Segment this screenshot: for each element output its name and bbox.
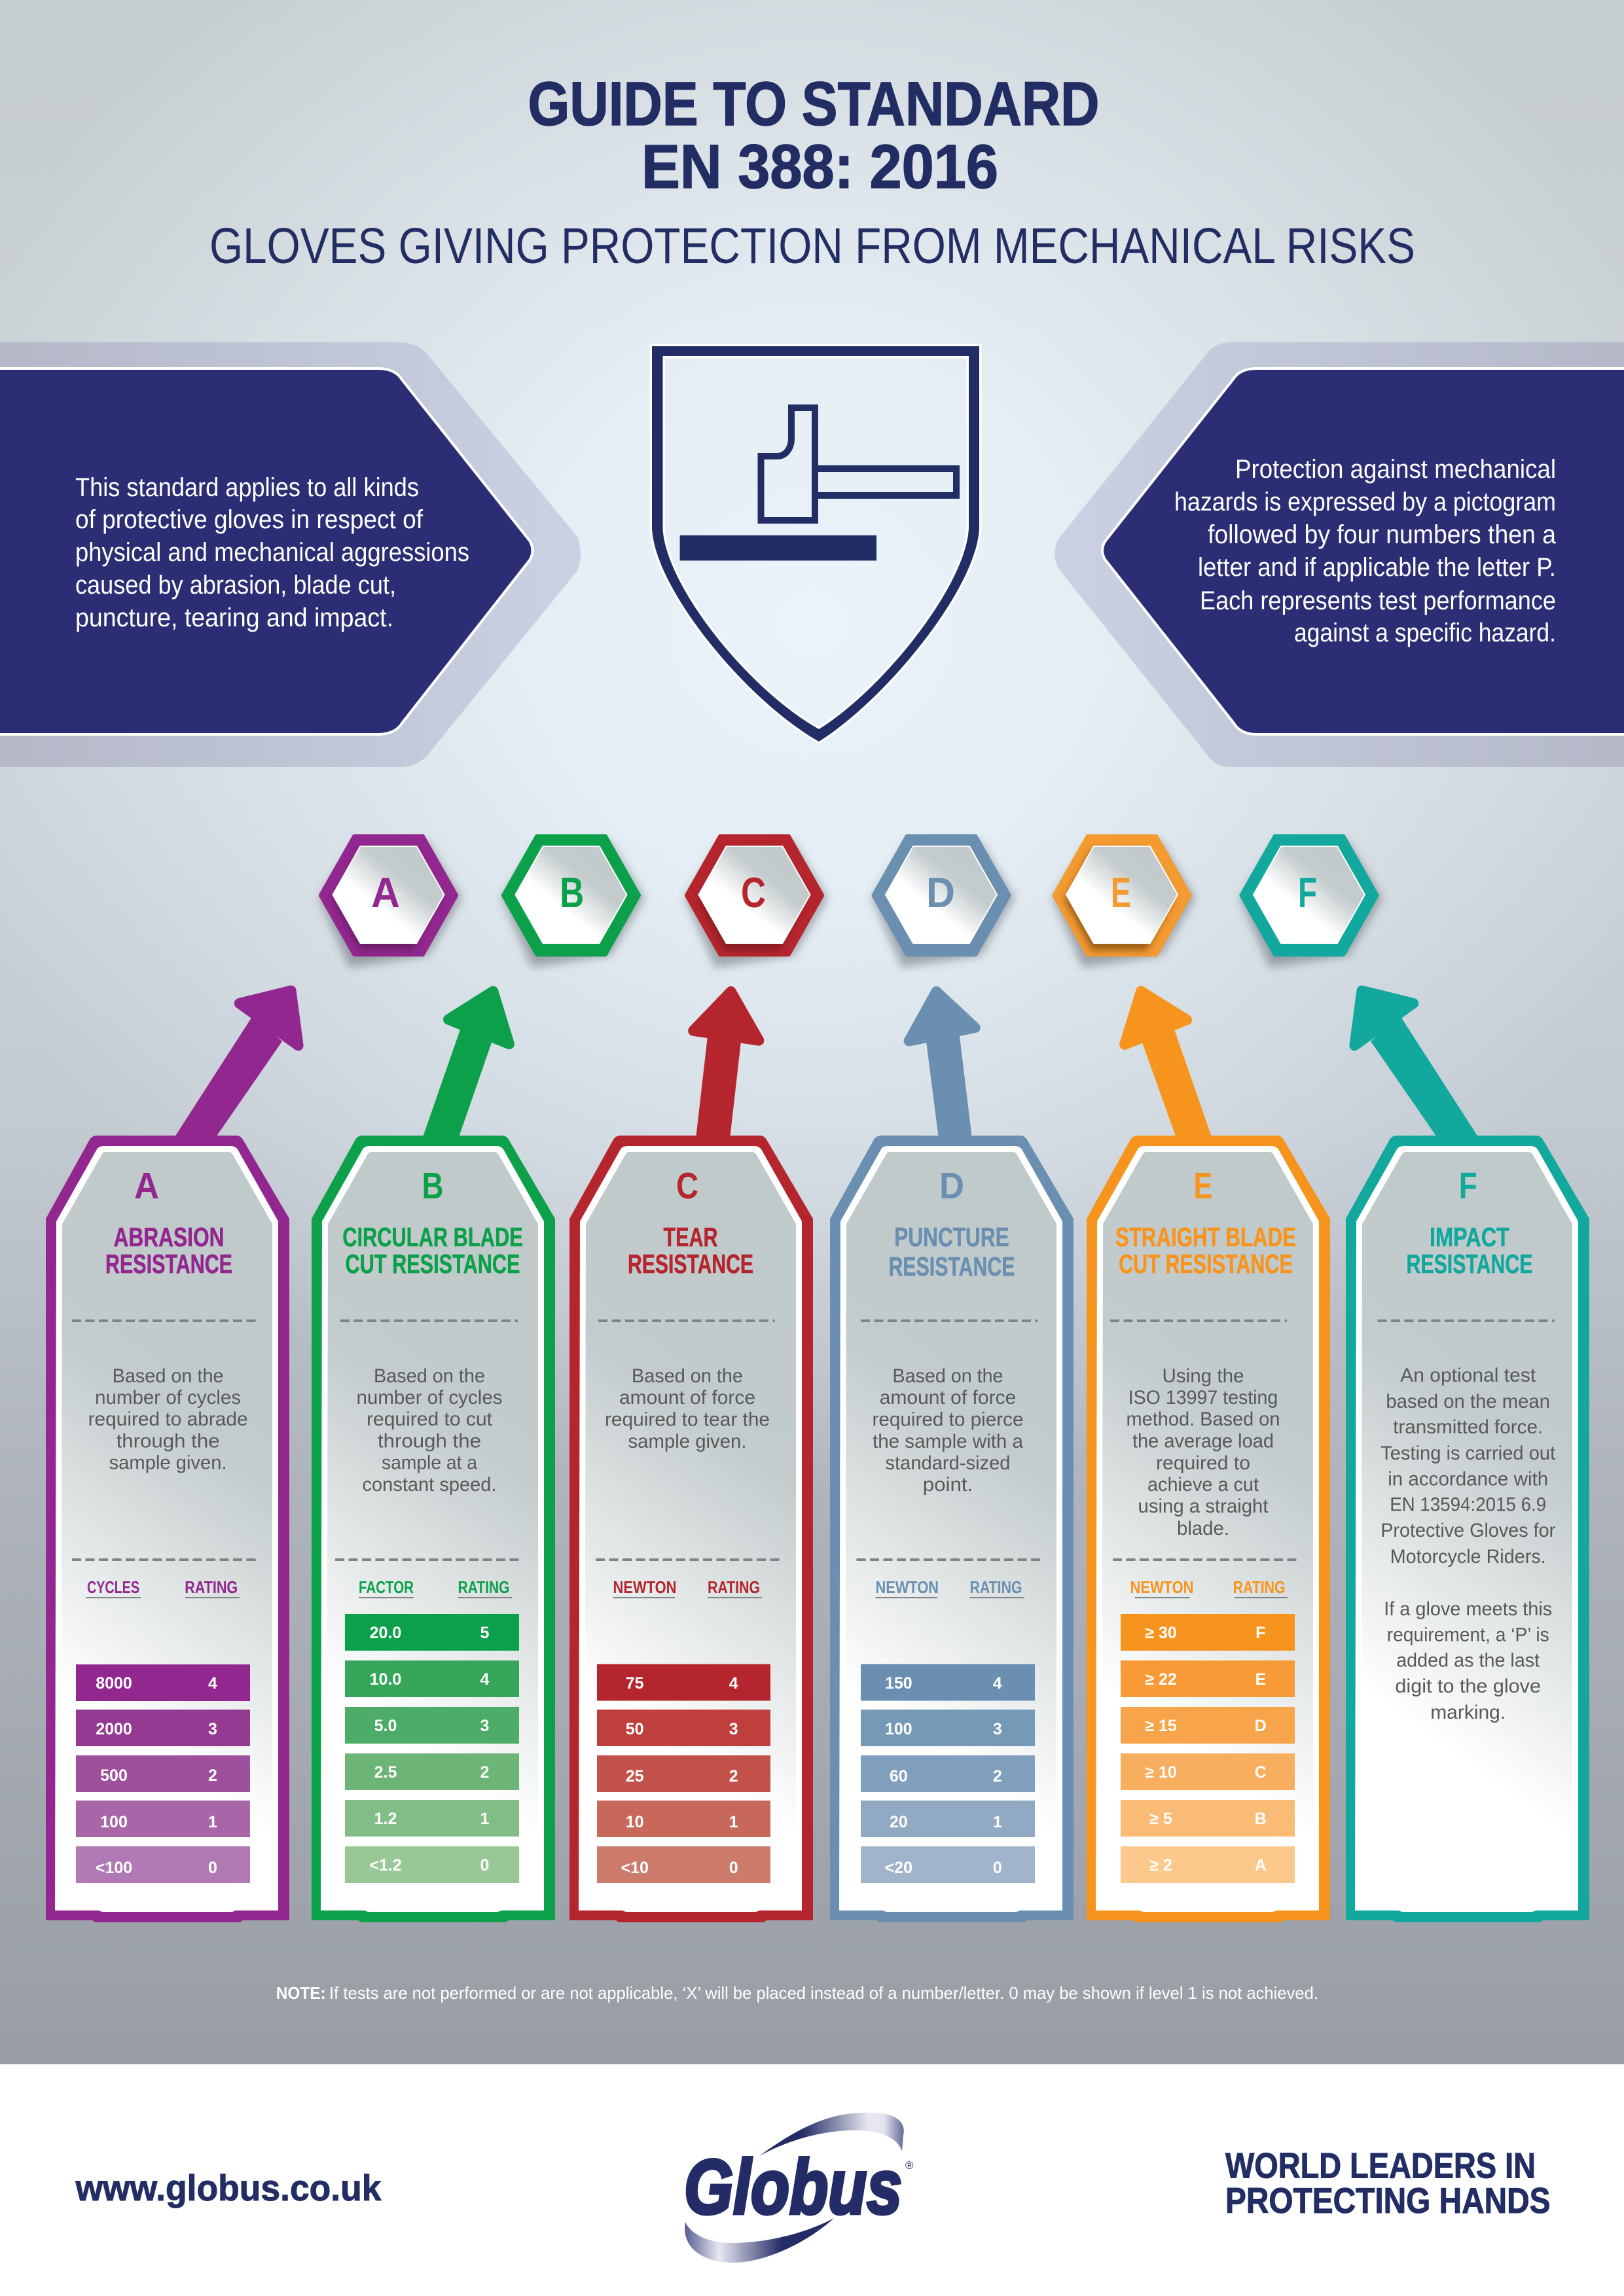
rating table: 8000 bbox=[96, 1674, 132, 1693]
rating table: 1 bbox=[729, 1813, 738, 1831]
rating table: ≥ 2 bbox=[1149, 1856, 1172, 1874]
table header: RATING bbox=[708, 1577, 760, 1597]
description: sample at a bbox=[382, 1452, 477, 1474]
rating table: <100 bbox=[96, 1859, 132, 1877]
panel: pictogram explanation: against a specific hazard. bbox=[1294, 619, 1556, 647]
description: required to tear the bbox=[605, 1408, 770, 1431]
arrow E bbox=[1125, 991, 1212, 1139]
description: required to cut bbox=[367, 1408, 493, 1430]
table header bbox=[86, 1577, 240, 1598]
card heading: CIRCULAR BLADE bbox=[342, 1222, 523, 1252]
card heading: ABRASION bbox=[114, 1222, 224, 1252]
card heading bbox=[1115, 1222, 1296, 1279]
panel: card F impact resistance bbox=[1346, 1136, 1589, 1922]
description: point. bbox=[923, 1474, 973, 1496]
rating table: 5 bbox=[480, 1624, 490, 1642]
rating table: <1.2 bbox=[369, 1856, 402, 1874]
rating table: C bbox=[1255, 1763, 1267, 1782]
description: An optional test bbox=[1400, 1365, 1536, 1386]
rating table: 500 bbox=[100, 1767, 128, 1785]
rating table: B bbox=[1255, 1810, 1267, 1828]
rating table bbox=[76, 1664, 250, 1883]
letter: D bbox=[926, 869, 955, 916]
panel: card A abrasion resistance bbox=[46, 1136, 289, 1922]
card letter: A bbox=[134, 1165, 159, 1207]
rating table bbox=[597, 1664, 770, 1883]
rating table: 50 bbox=[626, 1720, 644, 1738]
card heading: PUNCTURE bbox=[894, 1222, 1009, 1252]
table header bbox=[876, 1577, 1024, 1598]
panel: card B circular blade cut resistance bbox=[312, 1136, 555, 1922]
description: achieve a cut bbox=[1147, 1474, 1259, 1496]
description: constant speed. bbox=[363, 1474, 496, 1496]
card heading bbox=[1406, 1222, 1533, 1279]
rating table: 10.0 bbox=[370, 1670, 401, 1689]
description: ISO 13997 testing bbox=[1128, 1387, 1278, 1408]
rating table: 2 bbox=[480, 1763, 489, 1782]
description: Based on the bbox=[374, 1365, 485, 1387]
description: Based on the bbox=[893, 1365, 1003, 1387]
website: www.globus.co.uk bbox=[75, 2167, 382, 2208]
hexagon E bbox=[1053, 836, 1195, 967]
description: required to pierce bbox=[872, 1408, 1024, 1431]
rating table: 3 bbox=[993, 1720, 1002, 1738]
hexagon C bbox=[685, 836, 827, 967]
panel: card C tear resistance bbox=[569, 1136, 813, 1922]
description: using a straight bbox=[1138, 1496, 1269, 1517]
description bbox=[88, 1365, 248, 1474]
rating table: F bbox=[1255, 1624, 1265, 1642]
table header: CYCLES bbox=[87, 1577, 139, 1597]
rating table: ≥ 15 bbox=[1145, 1717, 1177, 1735]
arrow C bbox=[693, 992, 759, 1139]
rating table: 1 bbox=[480, 1810, 490, 1828]
hexagon D bbox=[872, 836, 1015, 967]
title: GUIDE TO STANDARD bbox=[528, 69, 1100, 139]
description: Based on the bbox=[113, 1365, 224, 1387]
description: added as the last bbox=[1396, 1649, 1540, 1672]
description: based on the mean bbox=[1386, 1391, 1550, 1412]
description: in accordance with bbox=[1388, 1469, 1548, 1490]
table header: NEWTON bbox=[1130, 1577, 1194, 1597]
rating table: 0 bbox=[480, 1856, 489, 1874]
rating table: 100 bbox=[885, 1720, 912, 1738]
panel: card E straight blade cut resistance bbox=[1087, 1136, 1330, 1922]
rating table: 1 bbox=[993, 1813, 1002, 1831]
rating table: 100 bbox=[100, 1813, 128, 1831]
description: number of cycles bbox=[95, 1387, 241, 1408]
rating table: 25 bbox=[626, 1767, 644, 1785]
rating table: 10 bbox=[626, 1813, 644, 1831]
rating table: <10 bbox=[621, 1859, 649, 1877]
description: Motorcycle Riders. bbox=[1390, 1546, 1546, 1568]
note: If tests are not performed or are not applicable, ‘X’ will be placed instead of a number/letter. 0 may be shown if level 1 is not achieved. bbox=[329, 1983, 1318, 2003]
description bbox=[1380, 1365, 1556, 1723]
letter: B bbox=[560, 869, 584, 916]
panel: scope of the standard: caused by abrasion, blade cut, bbox=[75, 571, 396, 600]
description bbox=[605, 1365, 770, 1452]
logo: Globus: ® bbox=[905, 2159, 914, 2172]
rating table: ≥ 10 bbox=[1145, 1763, 1177, 1782]
card heading: CUT RESISTANCE bbox=[346, 1249, 520, 1279]
arrow D bbox=[909, 992, 975, 1139]
rating table: D bbox=[1255, 1717, 1267, 1735]
rating table: 75 bbox=[626, 1674, 644, 1693]
card letter: F bbox=[1459, 1165, 1477, 1207]
rating table: 2 bbox=[993, 1767, 1002, 1785]
description: requirement, a ‘P’ is bbox=[1387, 1624, 1549, 1645]
rating table: 5.0 bbox=[374, 1717, 397, 1735]
description bbox=[1126, 1365, 1280, 1539]
rating table: 3 bbox=[480, 1717, 489, 1735]
description bbox=[356, 1365, 503, 1496]
description bbox=[872, 1365, 1024, 1496]
logo: Globus bbox=[684, 2113, 914, 2263]
letter: E bbox=[1111, 869, 1131, 916]
card heading: RESISTANCE bbox=[628, 1249, 753, 1279]
tagline bbox=[1225, 2145, 1550, 2221]
description: the sample with a bbox=[873, 1431, 1023, 1452]
letter: A bbox=[371, 869, 400, 916]
panel: pictogram explanation: hazards is expressed by a pictogram bbox=[1174, 488, 1556, 516]
rating table bbox=[345, 1614, 519, 1883]
letter: C bbox=[741, 869, 766, 916]
description: blade. bbox=[1177, 1518, 1229, 1539]
description: amount of force bbox=[619, 1387, 755, 1408]
rating table: 4 bbox=[480, 1670, 490, 1689]
description: transmitted force. bbox=[1393, 1416, 1543, 1438]
panel: scope of the standard: This standard applies to all kinds bbox=[75, 473, 419, 502]
table header: RATING bbox=[458, 1577, 509, 1597]
panel: pictogram explanation: Protection against mechanical bbox=[1235, 455, 1556, 484]
title: EN 388: 2016 bbox=[641, 132, 998, 202]
table header: NEWTON bbox=[613, 1577, 677, 1597]
rating table: 2 bbox=[208, 1767, 217, 1785]
arrow B bbox=[422, 991, 509, 1139]
table header bbox=[359, 1577, 512, 1598]
table header: RATING bbox=[1233, 1577, 1286, 1597]
rating table: 0 bbox=[208, 1859, 217, 1877]
rating table: 4 bbox=[729, 1674, 738, 1693]
note: NOTE: bbox=[276, 1983, 326, 2003]
rating table: 20 bbox=[890, 1813, 908, 1831]
panel: card D puncture resistance bbox=[830, 1136, 1074, 1922]
letter: F bbox=[1298, 869, 1317, 916]
tagline: PROTECTING HANDS bbox=[1225, 2180, 1550, 2221]
panel: scope of the standard: of protective gloves in respect of bbox=[75, 505, 424, 534]
description: amount of force bbox=[880, 1387, 1016, 1408]
panel: pictogram explanation: letter and if applicable the letter P. bbox=[1198, 553, 1556, 582]
card heading: IMPACT bbox=[1430, 1222, 1509, 1252]
description: method. Based on bbox=[1126, 1408, 1280, 1430]
rating table: 1.2 bbox=[374, 1810, 397, 1828]
rating table: A bbox=[1255, 1856, 1267, 1874]
table header: NEWTON bbox=[876, 1577, 939, 1597]
card heading bbox=[342, 1222, 523, 1279]
panel: scope of the standard: physical and mechanical aggressions bbox=[75, 538, 469, 567]
description: digit to the glove bbox=[1395, 1676, 1541, 1697]
rating table: 4 bbox=[208, 1674, 217, 1693]
table header: RATING bbox=[970, 1577, 1022, 1597]
tagline: WORLD LEADERS IN bbox=[1225, 2145, 1536, 2186]
rating table: 150 bbox=[885, 1674, 912, 1693]
card heading bbox=[105, 1222, 232, 1279]
card heading: CUT RESISTANCE bbox=[1119, 1249, 1293, 1279]
description: number of cycles bbox=[356, 1387, 503, 1408]
card heading: TEAR bbox=[664, 1222, 717, 1252]
table header bbox=[613, 1577, 762, 1598]
rating table bbox=[1121, 1614, 1295, 1883]
rating table: 0 bbox=[993, 1859, 1002, 1877]
panel: pictogram explanation: followed by four numbers then a bbox=[1208, 520, 1557, 549]
description: EN 13594:2015 6.9 bbox=[1390, 1494, 1546, 1516]
description: Using the bbox=[1163, 1365, 1244, 1387]
description: standard-sized bbox=[885, 1452, 1011, 1474]
table header: FACTOR bbox=[359, 1577, 414, 1597]
hexagon F bbox=[1240, 836, 1382, 967]
rating table: 0 bbox=[729, 1859, 738, 1877]
card heading bbox=[889, 1222, 1015, 1282]
description: marking. bbox=[1430, 1702, 1506, 1723]
description: Based on the bbox=[632, 1365, 743, 1387]
description: sample given. bbox=[109, 1452, 227, 1474]
description: Protective Gloves for bbox=[1380, 1520, 1555, 1541]
rating table: 1 bbox=[208, 1813, 217, 1831]
panel: scope of the standard: puncture, tearing and impact. bbox=[75, 603, 393, 632]
card heading bbox=[628, 1222, 753, 1279]
rating table: 3 bbox=[208, 1720, 217, 1738]
footer band bbox=[0, 2064, 1624, 2296]
description: required to bbox=[1156, 1452, 1250, 1474]
logo: Globus: Globus bbox=[684, 2144, 902, 2231]
description: the average load bbox=[1132, 1431, 1274, 1452]
rating table: ≥ 30 bbox=[1145, 1624, 1177, 1642]
description: Testing is carried out bbox=[1380, 1443, 1556, 1464]
rating table: 4 bbox=[993, 1674, 1002, 1693]
rating table: 20.0 bbox=[370, 1624, 401, 1642]
arrow F bbox=[1354, 991, 1479, 1139]
rating table: ≥ 22 bbox=[1145, 1670, 1177, 1689]
rating table: E bbox=[1255, 1670, 1266, 1689]
card letter: E bbox=[1194, 1165, 1212, 1207]
description: If a glove meets this bbox=[1384, 1598, 1552, 1620]
rating table: <20 bbox=[885, 1859, 912, 1877]
icon: shield with hammer pictogram bbox=[652, 346, 979, 742]
card letter: D bbox=[939, 1165, 964, 1207]
panel: pictogram explanation bbox=[1055, 342, 1624, 767]
panel: scope of the standard bbox=[0, 342, 581, 767]
rating table: 2000 bbox=[96, 1720, 132, 1738]
description: required to abrade bbox=[88, 1408, 248, 1430]
hexagon B bbox=[501, 836, 644, 967]
rating table: 3 bbox=[729, 1720, 738, 1738]
description: through the bbox=[378, 1431, 481, 1452]
rating table: 60 bbox=[890, 1767, 908, 1785]
description: through the bbox=[117, 1431, 220, 1452]
title bbox=[209, 69, 1415, 274]
rating table: ≥ 5 bbox=[1149, 1810, 1172, 1828]
rating table: 2.5 bbox=[374, 1763, 397, 1782]
table header: RATING bbox=[185, 1577, 238, 1597]
card heading: STRAIGHT BLADE bbox=[1115, 1222, 1296, 1252]
rating table: 2 bbox=[729, 1767, 738, 1785]
title: GLOVES GIVING PROTECTION FROM MECHANICAL RISKS bbox=[209, 218, 1415, 274]
card heading: RESISTANCE bbox=[889, 1251, 1015, 1282]
card letter: C bbox=[676, 1165, 698, 1207]
card letter: B bbox=[422, 1165, 444, 1207]
hexagon A bbox=[319, 836, 462, 967]
arrow A bbox=[173, 991, 298, 1139]
card heading: RESISTANCE bbox=[1406, 1249, 1533, 1279]
description: sample given. bbox=[628, 1431, 746, 1452]
card heading: RESISTANCE bbox=[105, 1249, 232, 1279]
table header bbox=[1130, 1577, 1288, 1598]
rating table bbox=[861, 1664, 1035, 1883]
panel: pictogram explanation: Each represents test performance bbox=[1200, 586, 1556, 615]
